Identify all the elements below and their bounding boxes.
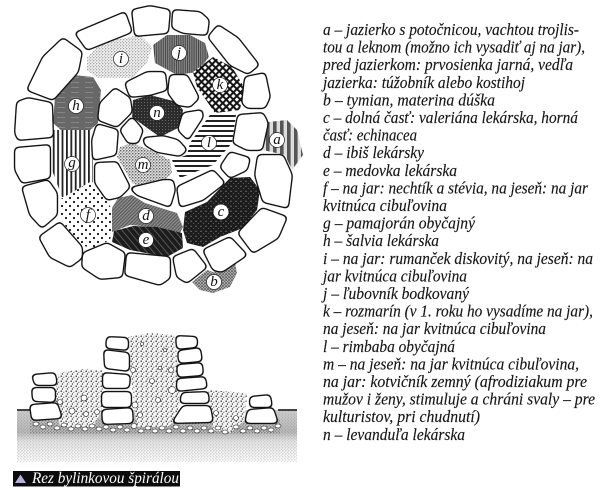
caption bar — [13, 470, 180, 487]
plant legend text: časť: echinacea — [323, 126, 417, 145]
plant legend text: f – na jar: nechtík a stévia, na jeseň: na jar — [323, 178, 589, 197]
plant legend text: l – rimbaba obyčajná — [323, 337, 455, 356]
bed k — [193, 57, 244, 113]
plant legend text: h – šalvia lekárska — [323, 231, 439, 250]
label h: h — [72, 98, 80, 114]
plant legend text: na jar: kotvičník zemný (afrodiziakum pre — [323, 372, 587, 391]
plant legend text: e – medovka lekárska — [323, 161, 457, 180]
plant legend text: jazierka: túžobník alebo kostihoj — [321, 73, 525, 92]
bed d — [112, 195, 183, 233]
label g: g — [68, 155, 76, 171]
label f — [80, 207, 96, 223]
label j — [172, 45, 186, 61]
bed m — [117, 143, 172, 188]
plant legend text: na jeseň: na jar kvitnúca cibuľovina — [323, 319, 546, 338]
label j: j — [175, 45, 181, 61]
label i: i — [119, 51, 123, 67]
planting beds — [52, 35, 303, 293]
icon: lavender triangle — [15, 474, 26, 483]
label m: m — [138, 157, 149, 173]
plant legend text: n – levanduľa lekárska — [323, 425, 465, 444]
bed f — [59, 182, 115, 248]
plant legend text: d – ibiš lekársky — [323, 143, 425, 162]
plant legend text: tou a leknom (možno ich vysadiť aj na jar), — [323, 38, 585, 57]
stone walls — [15, 6, 292, 285]
label d: d — [142, 208, 150, 224]
ground layer — [17, 409, 297, 462]
bed letter labels — [64, 45, 284, 290]
label b — [206, 274, 222, 290]
label c: c — [218, 204, 225, 220]
plant legend text: g – pamajorán obyčajný — [323, 214, 476, 233]
retaining stones — [30, 336, 278, 424]
label l — [202, 135, 216, 151]
label e: e — [143, 232, 150, 248]
plant legend text: b – tymian, materina dúška — [323, 90, 495, 109]
soil fill — [55, 333, 247, 433]
bed g — [52, 130, 93, 197]
label d — [138, 208, 154, 224]
bed a: pond — [263, 120, 303, 170]
label i — [114, 51, 128, 67]
label f: f — [86, 207, 92, 223]
plant legend text: m – na jeseň: na jar kvitnúca cibuľovina, — [323, 354, 579, 373]
bed i — [87, 35, 152, 78]
plant legend text: jar kvitnúca cibuľovina — [321, 266, 467, 285]
label n — [150, 105, 164, 121]
plant legend text: a – jazierko s potočnicou, vachtou trojlis- — [323, 20, 579, 39]
label b: b — [210, 274, 218, 290]
bed l — [172, 112, 236, 178]
label l: l — [207, 135, 211, 151]
cross-section diagram — [17, 333, 297, 462]
label e — [138, 232, 154, 248]
gravel pebbles — [33, 342, 281, 434]
label g — [64, 155, 80, 172]
bed n — [132, 95, 183, 137]
bed e — [112, 226, 183, 257]
plant legend text: pred jazierkom: prvosienka jarná, vedľa — [322, 55, 573, 74]
label k: k — [217, 77, 224, 93]
label a: a — [273, 132, 281, 148]
plant legend text: c – dolná časť: valeriána lekárska, horná — [323, 108, 578, 127]
bed b — [192, 263, 237, 293]
bed h — [53, 75, 101, 133]
plant legend text: kvitnúca cibuľovina — [323, 196, 447, 215]
label h — [68, 98, 84, 114]
plant legend text: j – ľubovník bodkovaný — [321, 284, 470, 303]
label n: n — [153, 105, 161, 121]
caption text: Rez bylinkovou špirálou — [31, 470, 179, 487]
label c — [214, 204, 228, 220]
bed c — [183, 177, 260, 247]
bed j — [153, 35, 209, 75]
label k — [212, 77, 228, 93]
plant legend text: kulturistov, pri chudnutí) — [323, 407, 480, 426]
spiral plan diagram — [15, 6, 303, 293]
plant legend text — [321, 20, 595, 444]
label a — [270, 132, 284, 148]
